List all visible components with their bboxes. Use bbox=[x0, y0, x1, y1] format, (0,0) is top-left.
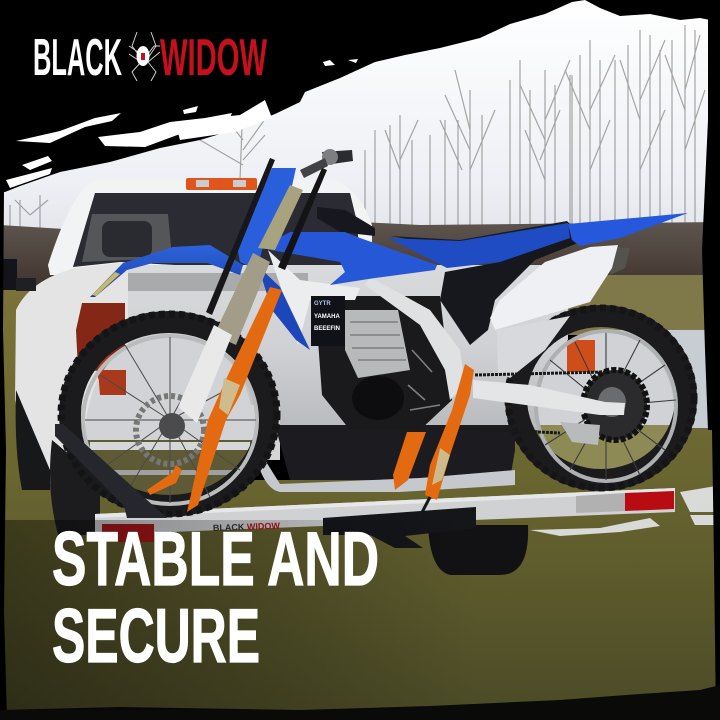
background: snow patches bbox=[530, 486, 716, 536]
front wheel bbox=[55, 314, 277, 518]
blue tank bbox=[265, 232, 437, 285]
front tyre bbox=[70, 322, 268, 506]
front fender bbox=[90, 245, 243, 297]
truck bbox=[2, 178, 568, 575]
drive chain bbox=[450, 372, 605, 433]
background: water bbox=[600, 330, 720, 432]
seat bbox=[390, 221, 572, 250]
orange strap rear second bbox=[393, 432, 426, 490]
number board blue bbox=[237, 168, 296, 270]
cylinder head bbox=[345, 310, 410, 378]
truck headrest bbox=[102, 221, 152, 257]
background: foreground grass bbox=[0, 290, 720, 720]
logo word WIDOW: WIDOW bbox=[160, 29, 268, 87]
tail light bbox=[76, 303, 125, 372]
rear exhaust bbox=[610, 247, 630, 275]
rear tyre bbox=[516, 316, 686, 480]
background: sky bbox=[0, 0, 720, 300]
truck bumper light extension bbox=[128, 405, 280, 460]
icon: spider bbox=[129, 32, 160, 81]
engine block bbox=[318, 296, 452, 430]
orange strap front lower bbox=[147, 465, 182, 495]
chrome bumper bbox=[260, 460, 515, 492]
rear tire of truck left bbox=[16, 390, 50, 490]
front brake rotor bbox=[136, 396, 204, 464]
brush edge: left side bbox=[0, 190, 7, 720]
hitch rack platform bbox=[95, 488, 675, 548]
number plate stickers: BEEEFIN bbox=[314, 326, 340, 332]
number plate stickers bbox=[314, 301, 340, 332]
tail light through wheel bbox=[98, 370, 126, 395]
blue rear fender bbox=[568, 213, 688, 246]
front hub bbox=[159, 413, 185, 439]
rear rim bbox=[536, 331, 676, 481]
front reflector bbox=[102, 524, 154, 542]
fork lower tube bbox=[214, 253, 270, 345]
front wheel chock bbox=[55, 424, 167, 518]
title line 2: SECURE bbox=[52, 594, 260, 679]
main frame tube bbox=[365, 277, 465, 400]
radiator shroud black bbox=[440, 225, 578, 345]
silver reflector bbox=[576, 493, 625, 513]
truck rear window bbox=[73, 193, 358, 268]
tail light lower bbox=[98, 355, 126, 400]
side mirror bbox=[2, 259, 17, 290]
subframe bbox=[497, 316, 570, 378]
brake guard bbox=[560, 422, 600, 445]
handlebar bbox=[300, 158, 328, 178]
front wheel lower opening bbox=[84, 440, 256, 503]
handlebar grip bbox=[322, 150, 353, 165]
rear wheel opening bbox=[537, 425, 675, 481]
tailgate dark band bbox=[128, 273, 308, 291]
bumper shadow bbox=[275, 425, 515, 480]
brush edge: black top banner bbox=[0, 0, 720, 192]
title line 1: STABLE AND bbox=[52, 517, 379, 602]
front spokes bbox=[85, 337, 256, 503]
front ratchet bbox=[219, 378, 240, 415]
truck left tyre bbox=[50, 440, 100, 535]
logo: BLACK bbox=[33, 29, 122, 87]
front wheel upper opening bbox=[84, 337, 256, 440]
title backdrop shading bbox=[0, 520, 480, 710]
background: far grass bbox=[360, 275, 720, 335]
background: bare trees bbox=[10, 25, 705, 240]
rear ratchet bbox=[432, 448, 450, 485]
black tie-down left bbox=[206, 158, 275, 315]
number plate panel bbox=[311, 296, 345, 346]
rack top edge bbox=[95, 488, 675, 518]
truck right tyre bbox=[428, 525, 528, 575]
fender sticker bbox=[92, 272, 120, 296]
rear reflector bbox=[625, 491, 674, 511]
rear side panel white bbox=[490, 245, 618, 330]
strap hook bbox=[416, 497, 430, 524]
truck brake light bbox=[186, 178, 257, 190]
blue fork guard bbox=[258, 266, 310, 350]
blue seat cover bbox=[388, 223, 570, 268]
rear taillight through wheel bbox=[567, 340, 595, 372]
rear wheel bbox=[508, 308, 694, 488]
black tie-down right bbox=[278, 168, 327, 270]
orange strap rear main bbox=[425, 364, 474, 500]
fork guard white bbox=[178, 325, 232, 423]
front rim bbox=[83, 336, 257, 504]
rack logo text: BLACK WIDOW bbox=[213, 521, 281, 533]
truck bedside bbox=[15, 262, 128, 490]
hitch bracket bbox=[323, 507, 476, 548]
rear spokes bbox=[538, 333, 676, 480]
truck window reflection bbox=[82, 214, 172, 262]
swingarm bbox=[473, 380, 625, 415]
motorcycle bbox=[90, 149, 688, 524]
rack deck bbox=[95, 488, 675, 535]
orange strap front main bbox=[187, 287, 282, 512]
brush edge: bottom bbox=[0, 685, 720, 720]
front wheel chrome band bbox=[90, 442, 250, 450]
rear sprocket bbox=[583, 370, 647, 440]
fork upper tube bbox=[258, 185, 303, 250]
number plate stickers: GYTR bbox=[314, 301, 331, 307]
black tank cap bbox=[317, 207, 375, 236]
frame front panel white bbox=[268, 250, 360, 345]
title bbox=[52, 517, 379, 679]
truck cab roof bbox=[48, 180, 372, 275]
background: distant treeline bbox=[0, 190, 720, 290]
truck tailgate bbox=[128, 265, 568, 430]
number plate stickers: YAMAHA bbox=[314, 314, 340, 320]
brush edge: right side bbox=[702, 18, 720, 720]
engine fins bbox=[350, 322, 440, 410]
brush flecks in banner bbox=[6, 59, 358, 188]
engine cover bbox=[352, 376, 404, 420]
